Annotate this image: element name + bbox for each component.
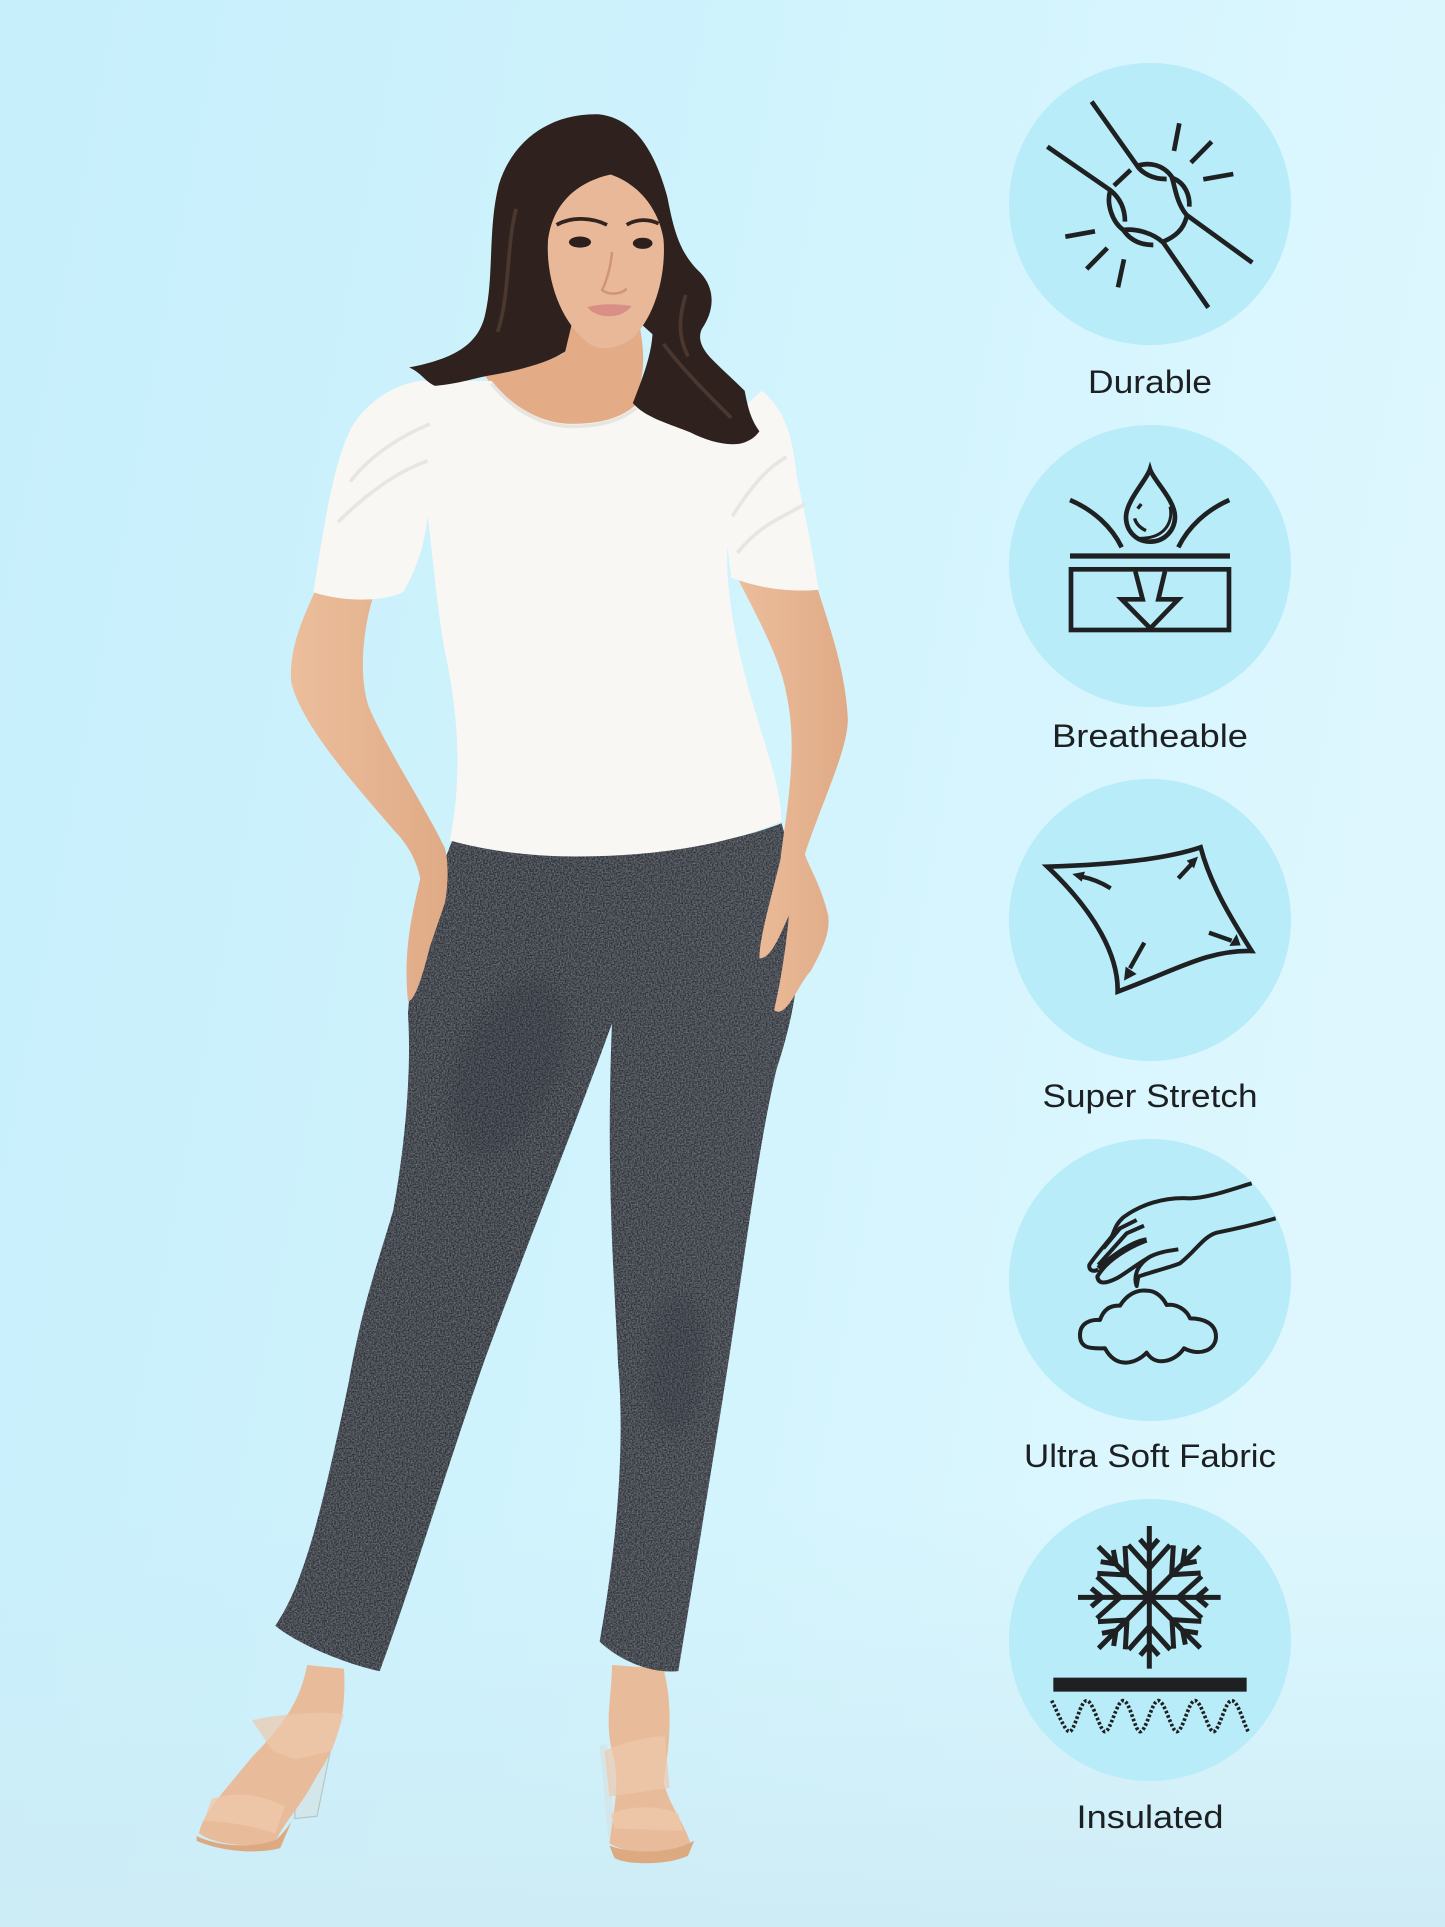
label: Ultra Soft Fabric [1024,1438,1276,1474]
nose [602,252,627,294]
circle [1009,425,1291,707]
icon: knotted threads [1047,102,1252,308]
eyes [569,237,652,249]
right foot and clear sandal [603,1665,694,1863]
snowflake [1078,1526,1221,1669]
white top [313,381,818,856]
icon: water drop and membrane [1070,469,1230,630]
dotted wave [1052,1701,1248,1732]
label: Breatheable [1052,718,1248,754]
icon: hand over cloud [1080,1183,1276,1363]
icon: stretched fabric with arrows [1047,847,1252,992]
face [548,174,664,348]
feature: Durable [1009,63,1291,400]
left arm and hand [291,587,448,1001]
model photo: woman in white top and dark corduroy trousers [197,114,848,1863]
trousers [275,823,799,1671]
neck and chest [485,322,643,424]
feature: Ultra Soft Fabric [1009,1139,1291,1474]
circle [1009,63,1291,345]
icon: snowflake above insulating layer [1052,1526,1248,1732]
label: Super Stretch [1042,1078,1258,1114]
feature: Breatheable [1009,425,1291,754]
feature: Insulated [1009,1499,1291,1835]
feature: Super Stretch [1009,779,1291,1114]
lips [587,304,632,316]
eyebrows [557,219,659,225]
right arm and hand [737,578,848,1012]
circle [1009,1139,1291,1421]
barrier [1053,1678,1247,1692]
circle [1009,779,1291,1061]
label: Durable [1088,364,1212,400]
circle [1009,1499,1291,1781]
hair [409,114,759,444]
left foot and clear sandal [197,1665,344,1851]
label: Insulated [1076,1799,1224,1835]
